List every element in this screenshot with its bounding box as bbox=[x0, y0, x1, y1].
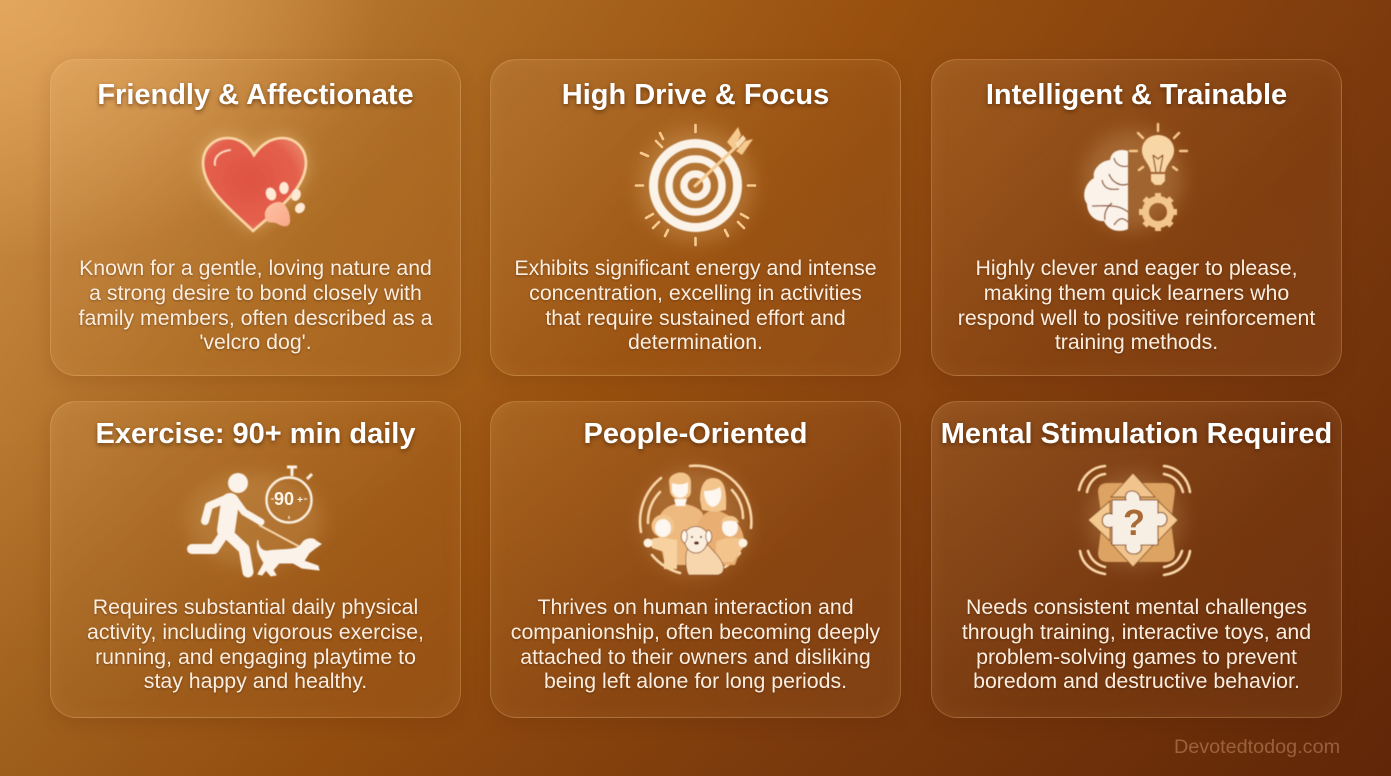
heading: Friendly & Affectionate: Friendly & Affectionate bbox=[97, 79, 414, 111]
panel: Intelligent & Trainable bbox=[931, 59, 1342, 376]
text: Exercise description: running, and engaging playtime to bbox=[95, 645, 416, 669]
icon: family with dog bbox=[638, 463, 754, 580]
text: Exercise description: stay happy and healthy. bbox=[144, 669, 367, 693]
text: Exercise description bbox=[87, 595, 424, 694]
text: Mental Stimulation description bbox=[962, 595, 1311, 693]
icon: brain, light bulb and gear bbox=[1079, 122, 1189, 234]
panel: People-Oriented bbox=[490, 401, 901, 718]
heading: People-Oriented: People-Oriented bbox=[584, 418, 808, 450]
icon: puzzle piece with question mark bbox=[1077, 464, 1192, 577]
text: question mark: ? bbox=[1122, 502, 1144, 542]
text: High Drive description: that require sustained effort and bbox=[545, 306, 846, 330]
heading: High Drive & Focus: High Drive & Focus bbox=[562, 79, 829, 111]
text: Mental Stimulation description: through training, interactive toys, and bbox=[962, 620, 1311, 644]
text: Intelligent description: training methods. bbox=[1055, 330, 1218, 354]
text: High Drive description: concentration, excelling in activities bbox=[529, 281, 862, 305]
text: Friendly description bbox=[78, 256, 433, 356]
text: Friendly description: Known for a gentle, loving nature and bbox=[79, 256, 432, 280]
text: Mental Stimulation description: Needs consistent mental challenges bbox=[966, 595, 1307, 619]
text: Intelligent description bbox=[958, 256, 1316, 355]
text: High Drive description: determination. bbox=[628, 330, 763, 354]
text: People-Oriented description: being left alone for long periods. bbox=[544, 669, 847, 693]
text: Intelligent description: Highly clever and eager to please, bbox=[975, 256, 1298, 280]
icon: heart with paw bbox=[196, 131, 314, 234]
heading: Exercise: 90+ min daily: Exercise: 90+ min daily bbox=[96, 418, 416, 450]
text: Friendly description: family members, often described as a bbox=[79, 306, 432, 330]
icon: target with arrow bbox=[634, 124, 758, 246]
text: Friendly description: 'velcro dog'. bbox=[199, 330, 312, 354]
text: Mental Stimulation description: boredom and destructive behavior. bbox=[973, 669, 1300, 693]
text: Intelligent description: respond well to positive reinforcement bbox=[958, 306, 1315, 330]
watermark: Devotedtodog.com bbox=[1174, 736, 1340, 758]
text: High Drive description bbox=[514, 256, 877, 354]
heading: Mental Stimulation Required: Mental Stimulation Required bbox=[941, 418, 1332, 450]
text: High Drive description: Exhibits significant energy and intense bbox=[514, 256, 877, 280]
text: People-Oriented description: Thrives on human interaction and bbox=[537, 595, 854, 619]
text: People-Oriented description: attached to their owners and disliking bbox=[520, 645, 871, 669]
text: People-Oriented description bbox=[511, 595, 880, 694]
heading: Intelligent & Trainable: Intelligent & Trainable bbox=[986, 79, 1287, 111]
text: Friendly description: a strong desire to bond closely with bbox=[89, 281, 422, 305]
text: Exercise description: activity, including vigorous exercise, bbox=[87, 620, 424, 644]
panel: Friendly & Affectionate bbox=[50, 59, 461, 376]
panel: Exercise: 90+ min daily bbox=[50, 401, 461, 718]
panel: High Drive & Focus bbox=[490, 59, 901, 376]
text: Intelligent description: making them quick learners who bbox=[984, 281, 1289, 305]
text: People-Oriented description: companionship, often becoming deeply bbox=[511, 620, 880, 644]
icon: runner with dog and stopwatch: + bbox=[297, 494, 303, 506]
text: Exercise description: Requires substantial daily physical bbox=[93, 595, 418, 619]
text: stopwatch 90: 90 bbox=[273, 488, 294, 508]
text: Mental Stimulation description: problem-solving games to prevent bbox=[976, 645, 1297, 669]
panel: Mental Stimulation Required bbox=[931, 401, 1342, 718]
icon: runner with dog and stopwatch bbox=[186, 464, 323, 578]
